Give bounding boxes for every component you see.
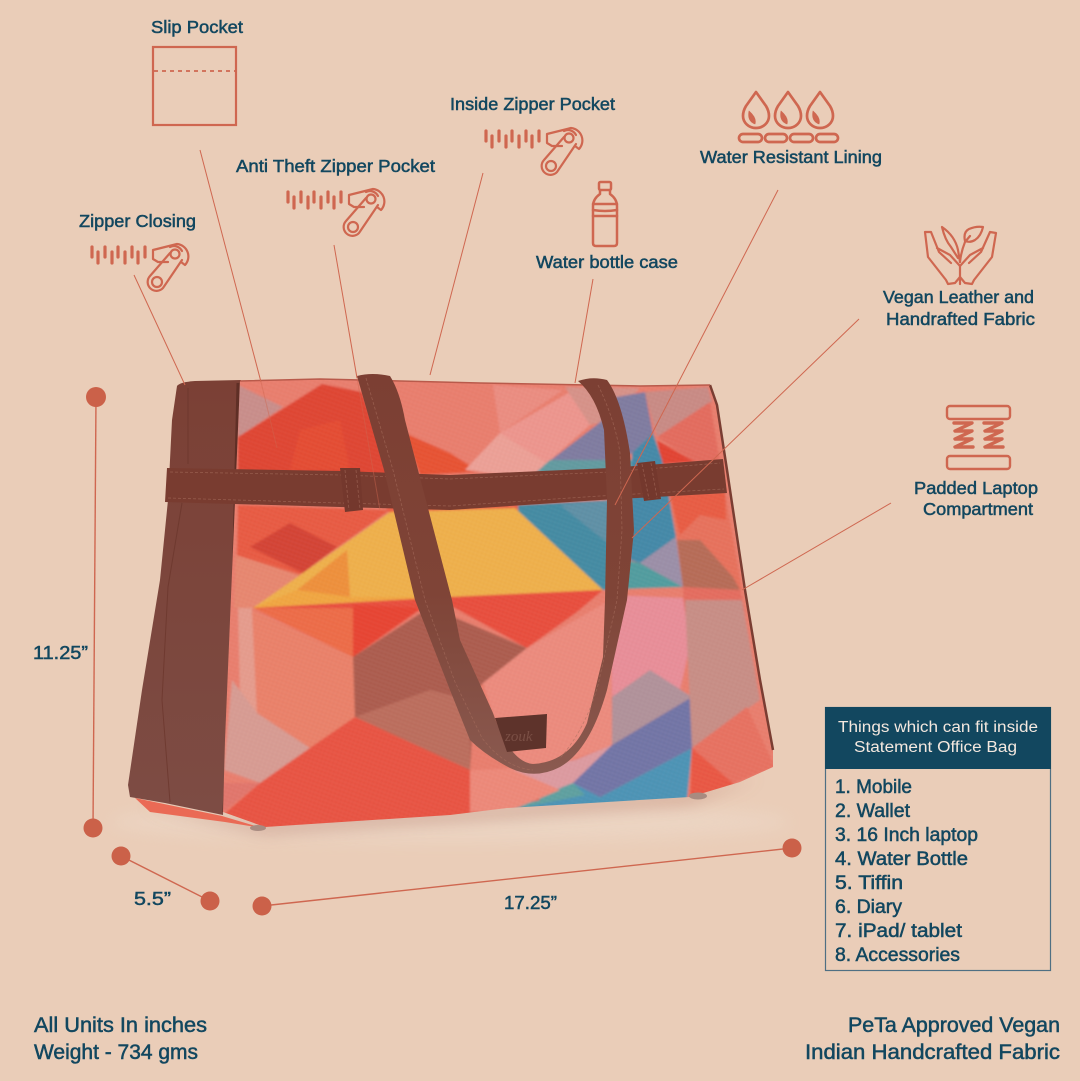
icon: slip pocket: [153, 47, 236, 125]
brand label patch: zouk: [504, 729, 533, 745]
panel list: 6. Diary: [835, 897, 903, 918]
belt: [165, 459, 727, 510]
bag feet: [250, 792, 707, 831]
panel list: [835, 777, 978, 966]
label: width value: 17.25”: [504, 892, 557, 913]
dimension: height: [84, 387, 106, 838]
label: vegan leather and handcrafted fabric: Handrafted Fabric: [886, 309, 1035, 329]
dimension: depth: [112, 846, 220, 910]
icon: spring padding: [947, 406, 1010, 469]
label: anti theft zipper pocket: Anti Theft Zipper Pocket: [236, 156, 435, 176]
panel list: 8. Accessories: [835, 945, 960, 966]
footer: units and weight: [34, 1014, 207, 1064]
label: padded laptop compartment: Padded Laptop: [914, 478, 1038, 498]
label: padded laptop compartment: [914, 478, 1038, 519]
panel header: Things which can fit inside: [838, 719, 1038, 736]
panel list: 1. Mobile: [835, 777, 912, 798]
label: padded laptop compartment: Compartment: [923, 499, 1033, 519]
label: depth value: 5.5”: [134, 888, 171, 909]
panel list: 7. iPad/ tablet: [835, 921, 963, 942]
left of yellow triangle, below belt: [236, 504, 388, 576]
bag front patterned fabric: [220, 375, 780, 835]
bag top edge: [240, 379, 710, 386]
panel list: 2. Wallet: [835, 801, 911, 822]
panel header: [825, 707, 1051, 769]
icon: water bottle: [593, 182, 617, 246]
shoulder straps: [357, 374, 634, 774]
label: vegan leather and handcrafted fabric: Vegan Leather and: [883, 287, 1034, 307]
dimension: width: [252, 838, 802, 916]
leader lines: [134, 150, 891, 590]
label: slip pocket: Slip Pocket: [151, 17, 243, 37]
label: water bottle case: Water bottle case: [536, 252, 678, 272]
label: water resistant lining: Water Resistant Lining: [700, 147, 882, 167]
panel header: Statement Office Bag: [854, 739, 1017, 756]
floor shadow: [110, 778, 790, 842]
panel list: 3. 16 Inch laptop: [835, 825, 978, 846]
bag side leather panel: [128, 380, 262, 828]
footer: units and weight: All Units In inches: [34, 1014, 207, 1037]
panel list: 4. Water Bottle: [835, 849, 968, 870]
panel: things which can fit inside: [825, 707, 1051, 970]
panel list: 5. Tiffin: [835, 873, 903, 894]
footer: certification: [805, 1014, 1060, 1064]
icon: zipper closing: [92, 244, 188, 291]
icon: inside zipper: [486, 128, 582, 175]
label: zipper closing: Zipper Closing: [79, 211, 196, 231]
belt loop right: [637, 461, 661, 501]
bag right edge piping: [710, 385, 773, 750]
icon: anti theft zipper: [288, 189, 384, 236]
label: vegan leather and handcrafted fabric: [883, 287, 1035, 329]
icon: water droplets: [739, 92, 838, 142]
icon: hands with leaves: [925, 227, 996, 284]
panel frame: [826, 708, 1050, 970]
footer: units and weight: Weight - 734 gms: [34, 1041, 198, 1064]
bag: [128, 374, 780, 835]
label: inside zipper pocket: Inside Zipper Pocket: [450, 94, 615, 114]
footer: certification: Indian Handcrafted Fabric: [805, 1041, 1060, 1064]
brand label patch: [495, 714, 547, 752]
footer: certification: PeTa Approved Vegan: [848, 1014, 1060, 1037]
belt loop left: [340, 468, 363, 512]
label: height value: 11.25”: [33, 642, 88, 663]
